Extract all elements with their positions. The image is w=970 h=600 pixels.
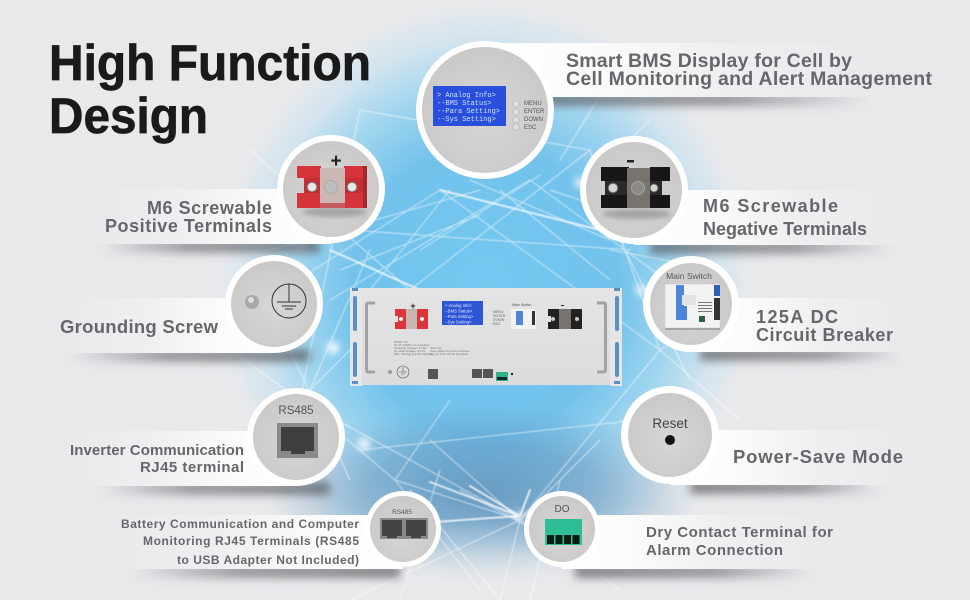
label bar: battery communication <box>100 515 403 578</box>
battery spec text: Model: XX <box>394 340 408 344</box>
icon: menu buttons: MENU <box>524 101 542 107</box>
battery spec text: Max. Charging & Discharging <box>394 352 433 356</box>
battery positive terminal: + <box>410 301 416 311</box>
label bar: battery communication: to USB Adapter Not Included) <box>177 553 359 567</box>
label bar: BMS <box>486 43 932 106</box>
circle: positive terminal: + <box>330 151 342 172</box>
title: High Function <box>49 35 371 91</box>
battery LCD: --Para Setting> <box>445 314 474 319</box>
battery main switch: Main Switch <box>512 303 531 307</box>
circle: RS485 battery ports <box>365 491 441 567</box>
icon: LCD screen <box>433 86 506 126</box>
label bar: battery communication: Monitoring RJ45 Terminals (RS485 <box>143 534 359 548</box>
label bar: circuit breaker <box>691 298 910 361</box>
network line pattern <box>230 80 750 600</box>
icon: menu buttons: DOWN <box>524 117 543 123</box>
battery spec text: 51.2V 100Ah Li-ion battery <box>394 343 430 347</box>
battery LCD: > Analog Info> <box>445 303 473 308</box>
label bar: BMS: Cell Monitoring and Alert Management <box>566 68 932 90</box>
circle: dry contact terminal <box>524 491 600 567</box>
battery spec text: Charging Voltage: 57.6V <box>394 346 427 350</box>
battery positive terminal <box>395 301 428 329</box>
battery spec text: Warning: <box>430 346 442 350</box>
label bar: negative terminals: Negative Terminals <box>703 219 867 239</box>
label bar: battery communication: Battery Communication and Computer <box>121 517 359 531</box>
circle: RS485 inverter port: RS485 <box>278 405 314 417</box>
icon: LCD screen: --BMS Status> <box>437 100 492 108</box>
battery spec text: Nominal Voltage: 51.2V <box>394 349 425 353</box>
icon: LCD screen: > Analog Info> <box>437 92 496 100</box>
circle: circuit breaker: Main Switch <box>666 271 712 281</box>
battery spec text: Keep away from fire and heat <box>430 349 469 353</box>
circle: dry contact terminal: DO <box>554 504 570 515</box>
label bar: dry contact: Dry Contact Terminal for <box>646 524 833 541</box>
battery ground symbol <box>388 366 409 378</box>
battery module <box>350 288 622 386</box>
label bar: grounding screw: Grounding Screw <box>60 316 219 337</box>
label bar: negative terminals: M6 Screwable <box>703 196 838 216</box>
battery LCD <box>442 301 506 326</box>
battery spec text: Do not short circuit terminals <box>430 352 469 356</box>
battery LCD: DOWN <box>493 318 505 322</box>
circle: BMS display <box>416 41 554 179</box>
circle: grounding screw <box>225 255 323 353</box>
icon: menu buttons: ENTER <box>524 109 545 115</box>
label bar: inverter communication <box>60 431 330 495</box>
label bar: positive terminals: Positive Terminals <box>105 216 272 236</box>
label bar: positive terminals: M6 Screwable <box>147 198 272 218</box>
battery rack ears <box>350 288 622 386</box>
label bar: inverter communication: Inverter Communication <box>70 442 244 459</box>
battery handles <box>366 303 606 372</box>
title: Design <box>49 88 208 144</box>
circle: RS485 battery ports: RS485 <box>392 509 412 516</box>
label bar: circuit breaker: 125A DC <box>756 307 838 327</box>
battery front panel <box>362 288 610 385</box>
label bar: power-save mode: Power-Save Mode <box>733 446 903 467</box>
circle: circuit breaker <box>643 256 739 352</box>
circle: positive terminal <box>277 135 385 243</box>
label bar: grounding screw <box>60 298 310 362</box>
icon: LCD screen: --Sys Setting> <box>437 116 496 124</box>
battery LCD: ESC <box>493 322 501 326</box>
label bar: power-save mode <box>670 430 920 494</box>
label bar: inverter communication: RJ45 terminal <box>140 459 244 476</box>
circle: reset button: Reset <box>652 416 688 431</box>
label bar: positive terminals <box>90 189 331 253</box>
background blue glow <box>220 5 750 600</box>
label bar: circuit breaker: Circuit Breaker <box>756 325 893 345</box>
battery ports <box>428 369 513 381</box>
battery negative terminal <box>548 305 582 329</box>
icon: ground symbol <box>272 284 306 318</box>
battery spec text <box>394 340 469 356</box>
circle: negative terminal <box>580 136 688 244</box>
label bar: BMS: Smart BMS Display for Cell by <box>566 50 852 72</box>
title <box>49 35 371 144</box>
circle: reset button <box>621 386 719 484</box>
icon: menu buttons: ESC <box>524 125 537 131</box>
sparkle lights <box>296 178 646 520</box>
icon: menu buttons <box>513 101 545 131</box>
label bar: dry contact: Alarm Connection <box>646 542 783 559</box>
battery LCD: MENU <box>493 310 504 314</box>
battery main switch <box>511 303 536 329</box>
battery LCD: ENTER <box>493 314 506 318</box>
battery LCD: --BMS Status> <box>445 308 473 314</box>
circle: RS485 inverter port <box>247 388 345 486</box>
label bar: dry contact <box>562 515 833 578</box>
icon: LCD screen: --Para Setting> <box>437 108 500 116</box>
battery LCD: --Sys Setting> <box>445 320 472 324</box>
label bar: negative terminals <box>634 190 900 254</box>
